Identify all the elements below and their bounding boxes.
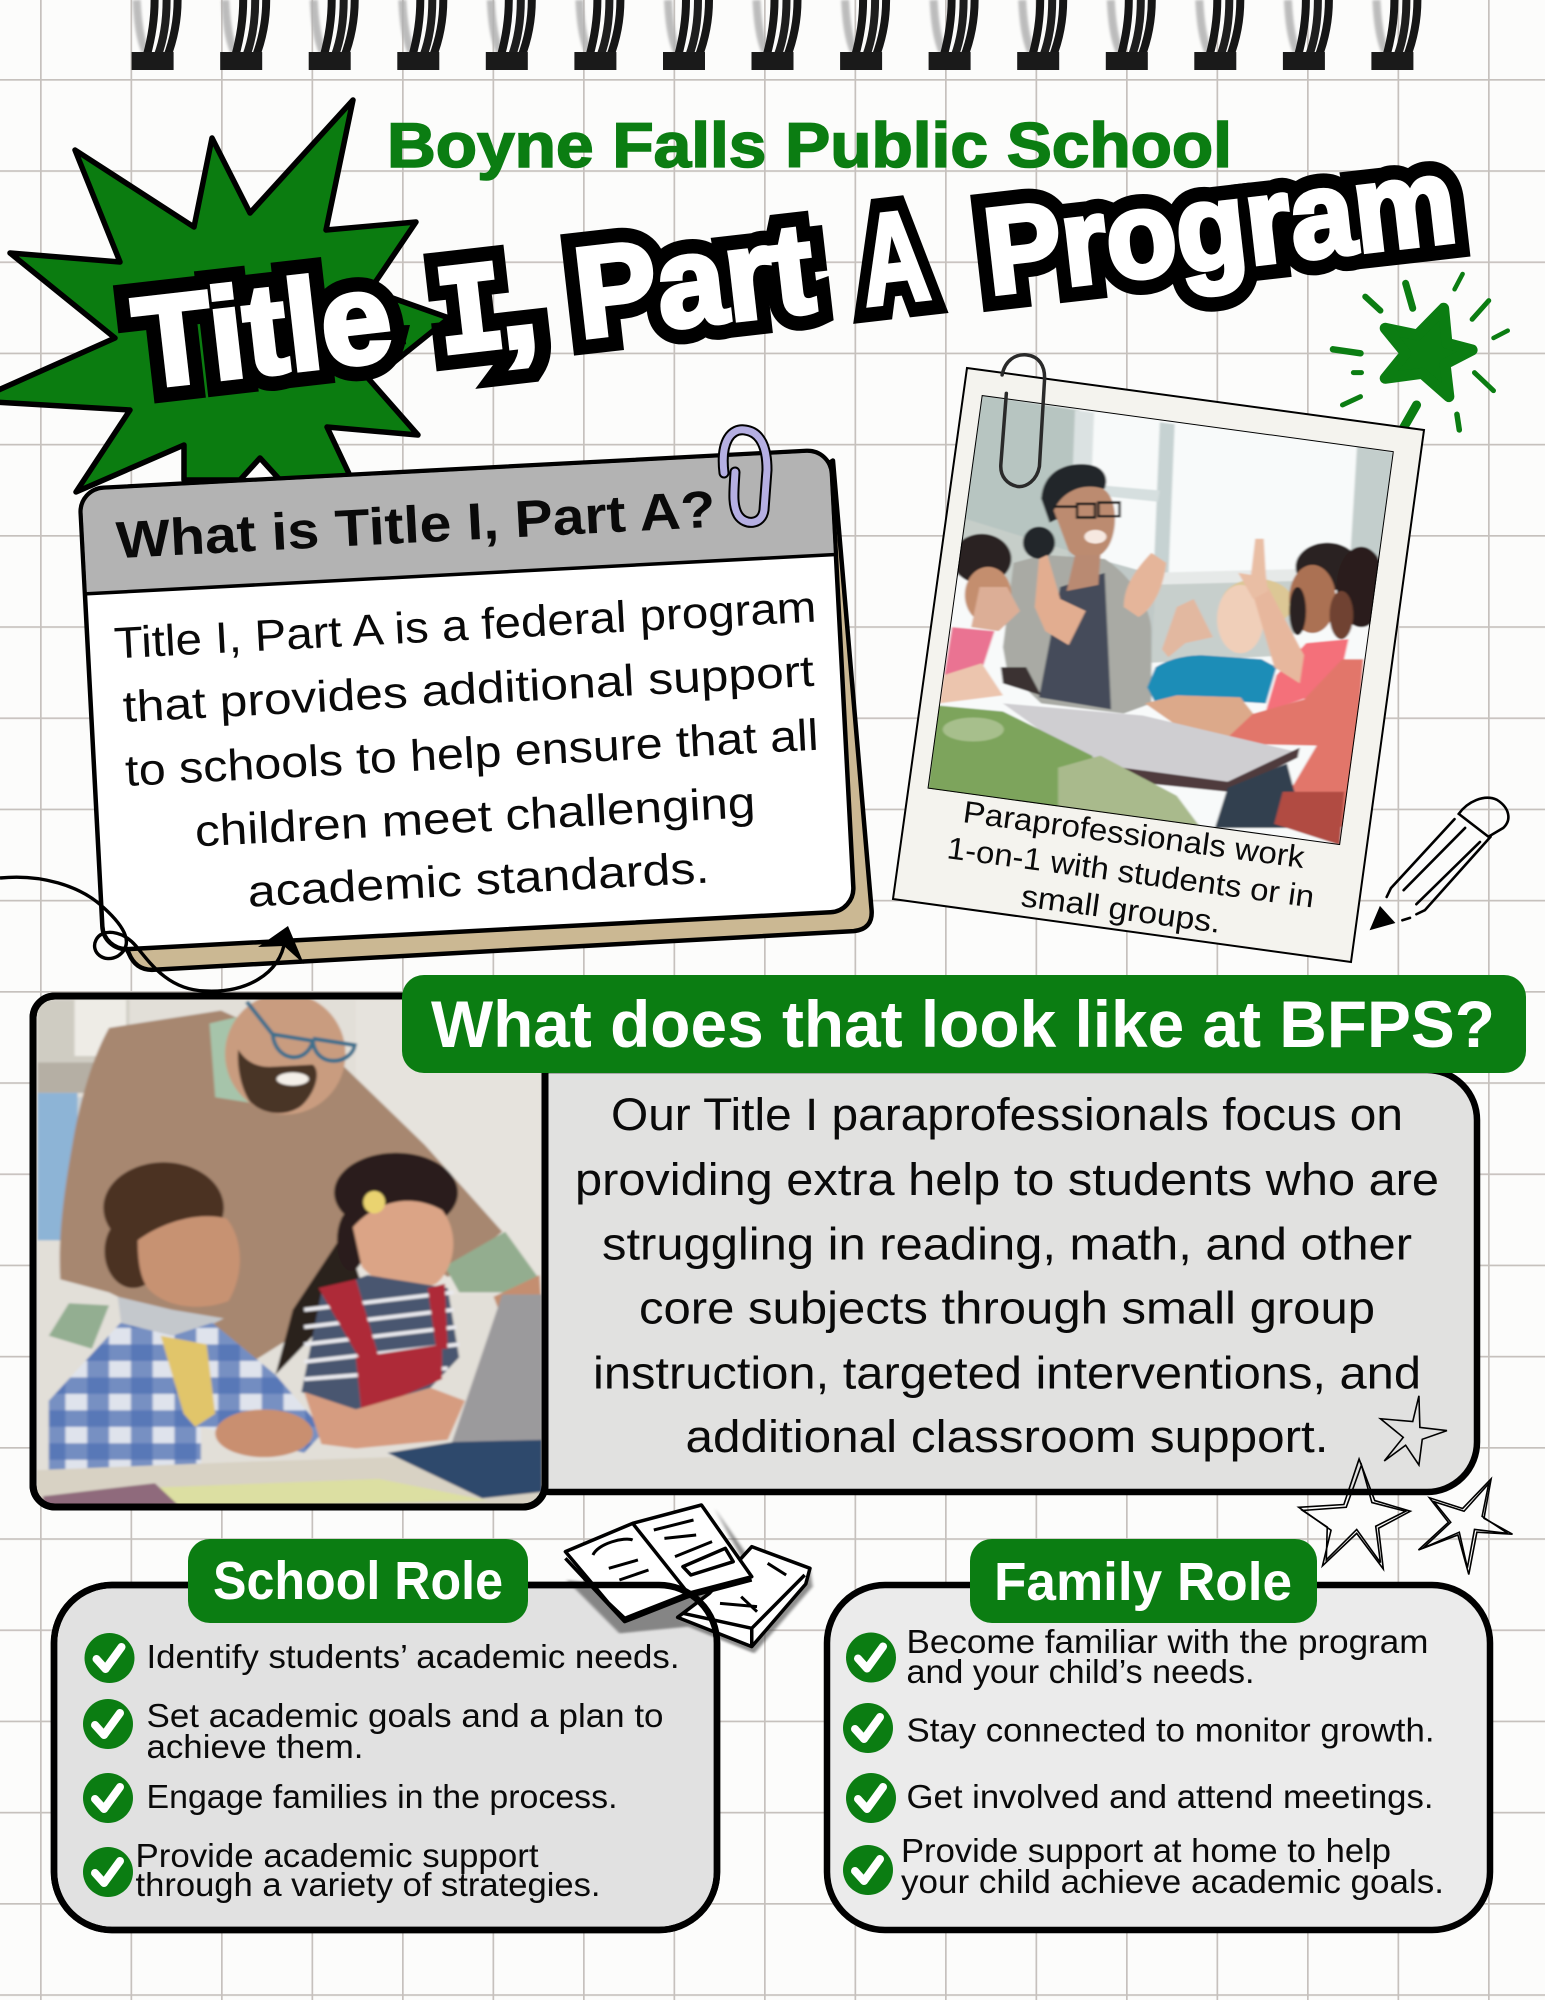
green banner [402,975,1526,1073]
card body text: Title I, Part A is a federal program [113,583,817,668]
card tan backing [89,460,873,972]
item: support at home [843,1832,1444,1900]
main title: Title [127,245,399,416]
school name heading: Boyne Falls Public School [387,111,1232,181]
family role heading: Family Role [994,1552,1292,1612]
school role box border over book [54,1585,717,1930]
icon: pencil [1372,798,1508,928]
icon: lavender paperclip [723,430,767,522]
decorative loop arrow [0,877,304,991]
panel body text: core subjects through small group [639,1282,1375,1334]
photo: teacher with two children at laptop [34,993,545,1507]
item: set goals [83,1697,664,1765]
panel body text: providing extra help to students who are [575,1154,1439,1205]
item: identify needs [84,1633,680,1683]
card body [79,450,855,950]
item: academic support: through a variety of strategies. [136,1866,600,1903]
photo: teacher with students [922,390,1402,852]
banner heading: What does that look like at BFPS? [431,987,1495,1061]
main title: I [429,241,513,392]
item: academic support [83,1837,600,1903]
item: set goals: achieve them. [146,1728,364,1765]
item: stay connected: Stay connected to monitor growth. [906,1712,1434,1748]
family role box [827,1585,1490,1930]
card body text: that provides additional support [122,647,815,732]
panel body text: instruction, targeted interventions, and [593,1348,1421,1398]
card body text: to schools to help ensure that all [124,711,820,796]
card header divider [85,554,836,594]
card body text: academic standards. [246,844,710,917]
card body text: children meet challenging [194,778,757,856]
main title: Program [977,131,1463,320]
panel: school role [54,1505,813,1930]
girl [276,1232,362,1375]
icon: green starburst [0,100,449,492]
item: become familiar: and your child’s needs. [906,1653,1254,1690]
panel body text [575,1089,1439,1462]
right kids [1296,543,1359,591]
school role heading: School Role [213,1551,503,1611]
middle kid [1224,579,1292,619]
grey text panel [500,1070,1477,1492]
family role tab [970,1539,1317,1623]
item: support at home: Provide support at home to help [901,1832,1391,1869]
main title: , [489,230,545,377]
icon: green star with rays [1333,274,1508,430]
icon: outline stars [1299,1396,1512,1574]
photo frame border [33,996,545,1507]
polaroid caption [945,794,1316,940]
item: support at home: your child achieve academic goals. [901,1863,1444,1900]
item: become familiar: Become familiar with the program [906,1623,1428,1660]
card heading: What is Title I, Part A? [115,481,717,570]
item: stay connected [843,1703,1434,1753]
panel body text: Our Title I paraprofessionals focus on [611,1089,1403,1140]
item: get involved: Get involved and attend meetings. [906,1778,1434,1815]
card body text [113,583,831,923]
laptop and table [451,1295,542,1446]
item: engage families [83,1773,618,1823]
item: engage families: Engage families in the process. [146,1778,618,1815]
polaroid caption: small groups. [1019,878,1223,940]
hands on table [1145,695,1253,740]
school role box [54,1585,717,1930]
photo frame [33,996,545,1507]
panel: family role [827,1539,1490,1930]
main title: Part [567,197,821,366]
item: academic support: Provide academic support [136,1837,538,1874]
card header band [82,452,834,593]
polaroid caption: Paraprofessionals work [961,794,1307,875]
teacher [1003,555,1151,713]
polaroid caption: 1-on-1 with students or in [945,830,1316,915]
panel: polaroid photo [893,355,1424,962]
spiral binding [132,0,1417,70]
panel body text: struggling in reading, math, and other [602,1218,1412,1270]
main title [127,123,1464,427]
left kid [952,534,1011,584]
item: identify needs: Identify students’ academic needs. [146,1638,680,1675]
main title: A [853,184,935,333]
boy [102,1161,225,1230]
polaroid frame [893,368,1424,962]
icon: black paperclip [1001,355,1045,487]
man [60,1010,502,1362]
item: become familiar [846,1623,1428,1690]
panel: what does that look like [33,975,1526,1507]
icon: open books [565,1505,813,1653]
item: set goals: Set academic goals and a plan to [146,1697,664,1734]
school role tab [188,1539,528,1623]
panel body text: additional classroom support. [686,1411,1328,1462]
table and chairs [1003,703,1296,784]
panel: what is Title I [79,449,873,972]
item: get involved [846,1773,1434,1823]
